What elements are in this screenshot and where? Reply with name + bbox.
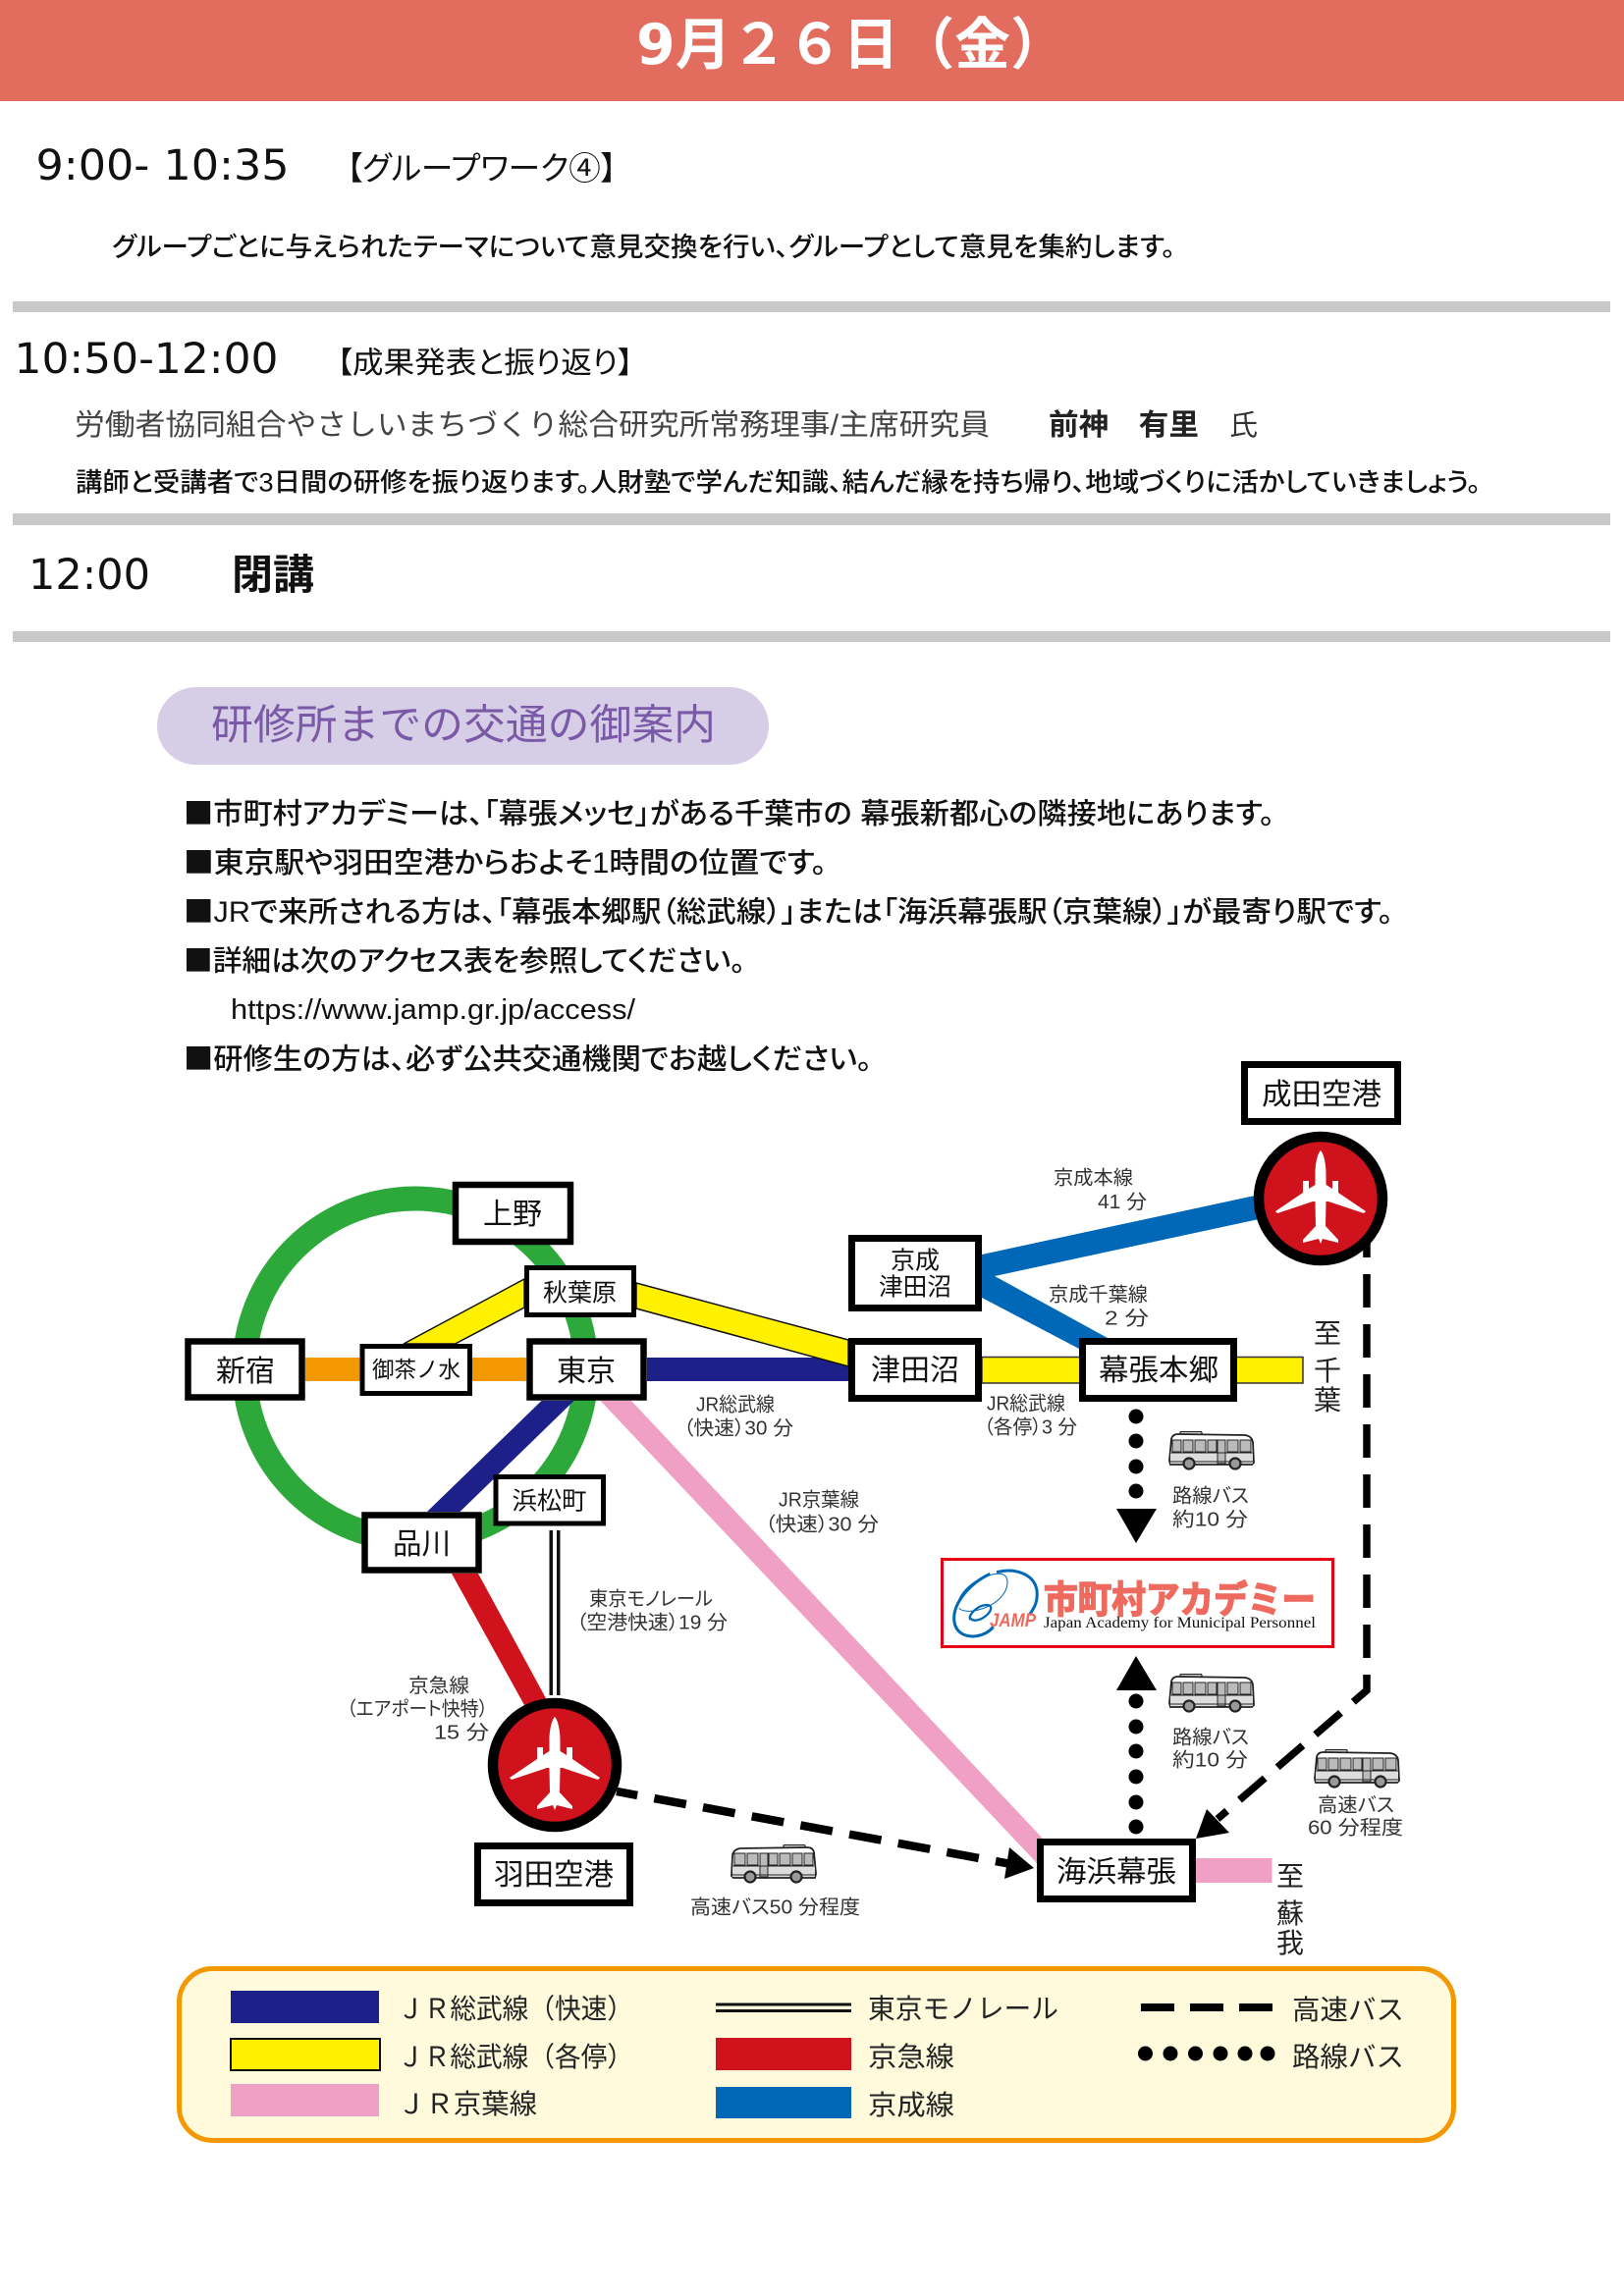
destination label: to Soga [1276,1861,1304,1958]
station: Kaihin-Makuhari [1041,1842,1192,1898]
line: blue Keisei [982,1196,1259,1349]
legend: Keisei: 京成線 [868,2090,954,2120]
station: Ueno: 上野 [483,1199,542,1231]
note 4: ■詳細は次のアクセス表を参照してください。 [184,938,745,980]
station: Kaihin-Makuhari: 海浜幕張 [1056,1856,1176,1889]
access heading pill [157,687,769,765]
lecturer name: 前神 有里 [1049,409,1199,442]
session: closing [28,552,314,600]
label: Keisei Chiba line: 2 分 [1105,1308,1149,1329]
logo swirl [954,1571,1037,1636]
station: Ochanomizu [362,1347,469,1394]
destination label: to Soga: 至 [1276,1861,1304,1892]
time 9:00: 9:00- 10:35 [35,142,289,190]
label: Keisei Chiba line: 京成千葉線 [1049,1284,1148,1306]
label: JR Sobu local: JR総武線 [987,1392,1065,1415]
line: pink stub to Soga [1196,1858,1272,1883]
line: navy Tokyo to Shinagawa [427,1401,574,1512]
label: Keisei main line [1054,1166,1147,1213]
time 12:00: 12:00 [28,552,150,600]
station: Shinjuku [189,1341,302,1398]
station: Shinagawa [365,1516,479,1571]
title: 9月２６日（金） [636,13,1066,78]
label: Keisei main line: 京成本線 [1054,1166,1133,1190]
station: Ochanomizu: 御茶ノ水 [372,1357,460,1382]
label: Keisei main line: 41 分 [1098,1191,1147,1213]
station: Ueno [456,1185,570,1242]
line: pink Keiyo [601,1401,1043,1863]
lecturer affiliation: 労働者協同組合やさしいまちづくり総合研究所常務理事/主席研究員 [75,409,990,442]
destination label: to Soga: 我 [1276,1928,1304,1958]
icon: bus upper [1169,1431,1254,1468]
note 3: ■JRで来所される方は、「幕張本郷駅（総武線）」または「海浜幕張駅（京葉線）」が最寄り駅です。 [184,889,1393,931]
station: Makuhari-Hongo: 幕張本郷 [1099,1355,1218,1387]
label: JR Keiyo rapid: JR京葉線 [779,1488,859,1512]
access heading pill: 研修所までの交通の御案内 [211,703,716,749]
header banner: date [0,0,1624,101]
express bus dashed route: Haneda to Kaihin-Makuhari [617,1791,1034,1879]
station: Tokyo: 東京 [557,1356,616,1388]
legend: Tokyo Monorail [716,1994,1058,2024]
label: Keikyu line: （エアポート快特） [347,1698,488,1720]
line: yellow Akihabara to Tsudanuma [636,1283,848,1366]
honorific: 氏 [1229,409,1258,442]
station: Narita Airport: 成田空港 [1262,1079,1381,1111]
station: Hamamatsucho: 浜松町 [513,1488,587,1516]
label: express bus Narita [1308,1794,1403,1840]
destination label: to Soga: 蘇 [1276,1898,1304,1929]
session: presentation and review [14,336,1481,497]
line: red Keikyu [452,1574,547,1705]
note 5: ■研修生の方は、必ず公共交通機関でお越しください。 [184,1037,872,1078]
destination label: to Chiba: 葉 [1314,1385,1341,1415]
airport icon: Narita [1259,1137,1382,1260]
label: JR Sobu rapid [683,1394,793,1439]
label: JR Sobu local [984,1392,1077,1439]
session: group work [35,142,1175,262]
icon: bus express Haneda [731,1845,816,1883]
note 1: ■市町村アカデミーは、「幕張メッセ」がある千葉市の 幕張新都心の隣接地にあります。 [184,791,1274,832]
line: navy Sobu rapid Tokyo to Tsudanuma [647,1358,854,1381]
access url: https://www.jamp.gr.jp/access/ [231,994,636,1026]
line: orange Chuo [305,1358,526,1381]
station: Hamamatsucho [496,1476,603,1523]
label: Keisei Chiba line [1049,1284,1149,1329]
station: Makuhari-Hongo [1082,1341,1233,1398]
label: local bus lower [1172,1726,1249,1771]
label: JR Sobu rapid: JR総武線 [696,1394,775,1415]
express bus dashed route: Narita to Kaihin-Makuhari [1196,1242,1367,1839]
legend panel [179,1969,1453,2140]
label: local bus upper: 約10 分 [1172,1508,1248,1531]
label: Keikyu line [347,1675,489,1743]
session description: 講師と受講者で3日間の研修を振り返ります。人財塾で学んだ知識、結んだ縁を持ち帰り、地域づくりに活かしていきましょう。 [76,467,1481,497]
logo english name: Japan Academy for Municipal Personnel [1044,1615,1317,1631]
label: Tokyo Monorail [576,1588,728,1633]
legend: local bus [1138,2042,1404,2072]
legend: JR Sobu rapid [231,1991,633,2024]
station: Akihabara: 秋葉原 [543,1280,617,1308]
legend: Keikyu: 京急線 [868,2042,954,2072]
legend: express bus [1141,1995,1404,2025]
session description: グループごとに与えられたテーマについて意見交換を行い、グループとして意見を集約します。 [112,233,1175,262]
label: JR Keiyo rapid: （快速）30 分 [765,1514,879,1535]
station: Haneda Airport: 羽田空港 [494,1859,614,1892]
legend: JR Sobu local [231,2039,633,2072]
access notes list [184,791,1393,1078]
label: local bus lower: 路線バス [1172,1726,1249,1749]
station: Keisei Tsudanuma: 津田沼 [879,1274,951,1302]
line: yellow Tsudanuma to Chiba [982,1357,1303,1383]
label: local bus lower: 約10 分 [1172,1749,1248,1771]
legend: express bus: 高速バス [1292,1995,1404,2025]
legend: Keisei [716,2087,954,2120]
label: Keikyu line: 15 分 [434,1722,489,1743]
logo: JAMP Academy [943,1559,1333,1647]
legend: local bus: 路線バス [1292,2042,1404,2072]
station: Keisei Tsudanuma: 京成 [891,1247,940,1274]
label: JR Keiyo rapid [765,1488,879,1535]
legend: Tokyo Monorail: 東京モノレール [868,1994,1058,2024]
label: local bus upper: 路線バス [1172,1484,1249,1508]
destination label: to Chiba: 至 [1314,1318,1341,1349]
line: yellow Ochanomizu to Akihabara [404,1279,524,1344]
label: JR Sobu rapid: （快速）30 分 [683,1417,793,1439]
station: Tsudanuma [852,1341,978,1398]
session heading: 【グループワーク④】 [347,150,617,187]
route map [189,1064,1403,1958]
station: Akihabara [526,1268,634,1315]
logo acronym: JAMP [990,1611,1036,1631]
station: Tsudanuma: 津田沼 [871,1355,959,1387]
destination label: to Chiba: 千 [1314,1356,1341,1386]
label: Keikyu line: 京急線 [408,1675,469,1697]
local bus dots: Makuhari-Hongo to Academy [1116,1410,1157,1543]
local bus dots: Kaihin-Makuhari to Academy [1116,1656,1157,1834]
icon: bus lower [1169,1675,1254,1712]
legend: JR Sobu rapid: ＪＲ総武線（快速） [398,1994,633,2024]
label: express bus Haneda: 高速バス50 分程度 [690,1896,860,1918]
station: Haneda Airport [477,1845,630,1902]
airport icon: Haneda [493,1703,617,1827]
legend: JR Keiyo [231,2084,537,2119]
line: JR Yamanote loop [244,1199,586,1540]
time 10:50: 10:50-12:00 [14,336,279,384]
closing heading: 閉講 [232,552,314,598]
destination label: to Chiba [1314,1318,1341,1415]
station: Shinagawa: 品川 [393,1528,451,1561]
station: Tokyo [530,1341,644,1398]
legend: JR Keiyo: ＪＲ京葉線 [398,2089,537,2119]
legend: JR Sobu local: ＪＲ総武線（各停） [398,2042,633,2072]
label: Tokyo Monorail: （空港快速）19 分 [576,1612,728,1633]
station: Keisei Tsudanuma [852,1239,978,1308]
note 2: ■東京駅や羽田空港からおよそ1時間の位置です。 [184,840,827,881]
station: Shinjuku: 新宿 [216,1356,275,1388]
logo name: 市町村アカデミー [1044,1579,1316,1622]
legend: Keikyu [716,2038,954,2072]
label: express bus Narita: 高速バス [1318,1794,1394,1816]
icon: bus express Narita [1315,1749,1399,1787]
label: JR Sobu local: （各停）3 分 [984,1415,1077,1439]
line: Tokyo Monorail [550,1530,560,1695]
label: local bus upper [1172,1484,1249,1531]
label: express bus Narita: 60 分程度 [1308,1816,1403,1840]
session heading: 【成果発表と振り返り】 [337,347,633,380]
station: Narita Airport [1245,1064,1398,1121]
label: Tokyo Monorail: 東京モノレール [589,1588,713,1610]
